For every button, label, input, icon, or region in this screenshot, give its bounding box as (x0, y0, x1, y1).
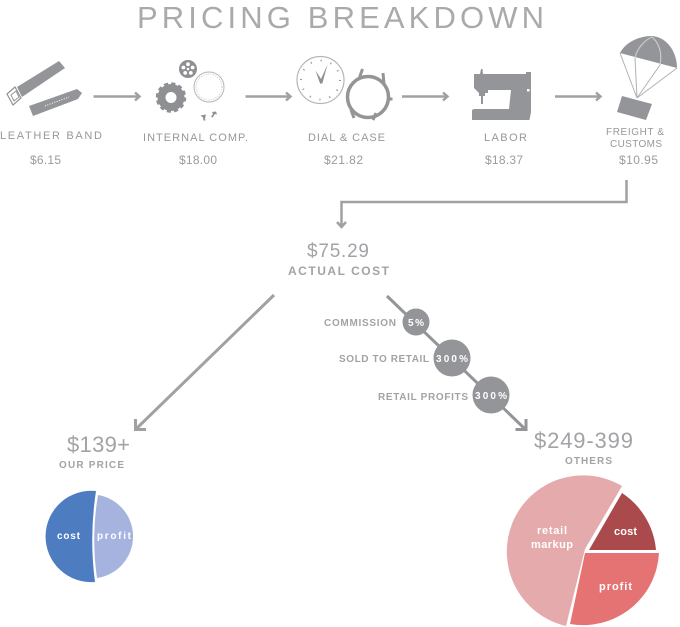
pie chart: others (507, 475, 659, 626)
actual cost figure: $75.29 (307, 241, 369, 262)
arrow: to our price (136, 295, 274, 430)
pie chart: others: cost (614, 526, 637, 538)
our price heading: OUR PRICE (59, 460, 124, 471)
arrow: labor to freight (555, 92, 600, 100)
icon: internal components (158, 60, 224, 120)
pie chart: others: profit (599, 581, 632, 593)
label: labor: LABOR (484, 132, 527, 144)
our price heading (59, 432, 130, 471)
step: commission (324, 308, 430, 336)
label: freight and customs: CUSTOMS (610, 139, 662, 150)
arrow: components to dial (246, 92, 290, 100)
label: leather band: LEATHER BAND (0, 130, 102, 142)
step: freight and customs (606, 36, 677, 167)
others heading (534, 428, 633, 467)
label: dial and case: DIAL & CASE (308, 132, 385, 144)
actual cost figure (288, 241, 390, 278)
pie chart: others: markup (531, 539, 573, 551)
price: labor: $18.37 (485, 153, 523, 167)
step: retail profits (378, 376, 510, 414)
price: freight and customs: $10.95 (619, 153, 658, 167)
others heading: $249-399 (534, 428, 633, 453)
pie chart: others: retail (537, 525, 567, 537)
slice: cost (589, 493, 656, 550)
price: dial and case: $21.82 (324, 153, 363, 167)
label: internal components: INTERNAL COMP. (143, 132, 248, 144)
pie chart: our price: profit (97, 531, 132, 542)
slice: cost (46, 491, 96, 582)
step: sold to retail: 300% (436, 354, 468, 365)
arrow: dial to labor (402, 92, 448, 100)
step: labor (472, 69, 531, 167)
step: dial and case (297, 56, 392, 167)
step: leather band (0, 61, 102, 167)
price: leather band: $6.15 (30, 153, 61, 167)
label: freight and customs: FREIGHT & (606, 127, 664, 138)
step: commission: COMMISSION (324, 318, 396, 329)
icon: sewing machine (472, 69, 531, 120)
our price heading: $139+ (67, 432, 130, 457)
actual cost figure: ACTUAL COST (288, 264, 390, 278)
slice: profit (94, 495, 133, 578)
icon: leather band (7, 61, 82, 116)
connector arrow to actual cost (337, 180, 626, 227)
arrow: markup chain to others (324, 296, 526, 430)
title: PRICING BREAKDOWN (137, 0, 544, 35)
pie chart: our price (46, 491, 133, 582)
step: retail profits: 300% (475, 391, 507, 402)
others heading: OTHERS (565, 456, 612, 467)
icon: parachute (617, 36, 677, 120)
slice: retail markup (507, 475, 622, 626)
step: internal components (143, 60, 248, 167)
price: internal components: $18.00 (179, 153, 217, 167)
icon: clock dial (297, 56, 344, 104)
step: sold to retail: SOLD TO RETAIL (339, 354, 429, 365)
pie chart: our price: cost (57, 531, 81, 542)
arrow: band to components (94, 92, 140, 100)
icon: watch case (348, 69, 392, 120)
step: retail profits: RETAIL PROFITS (378, 392, 468, 403)
step: commission: 5% (408, 318, 424, 329)
slice: profit (570, 553, 659, 625)
step: sold to retail (339, 340, 470, 376)
label: freight and customs (606, 127, 664, 150)
